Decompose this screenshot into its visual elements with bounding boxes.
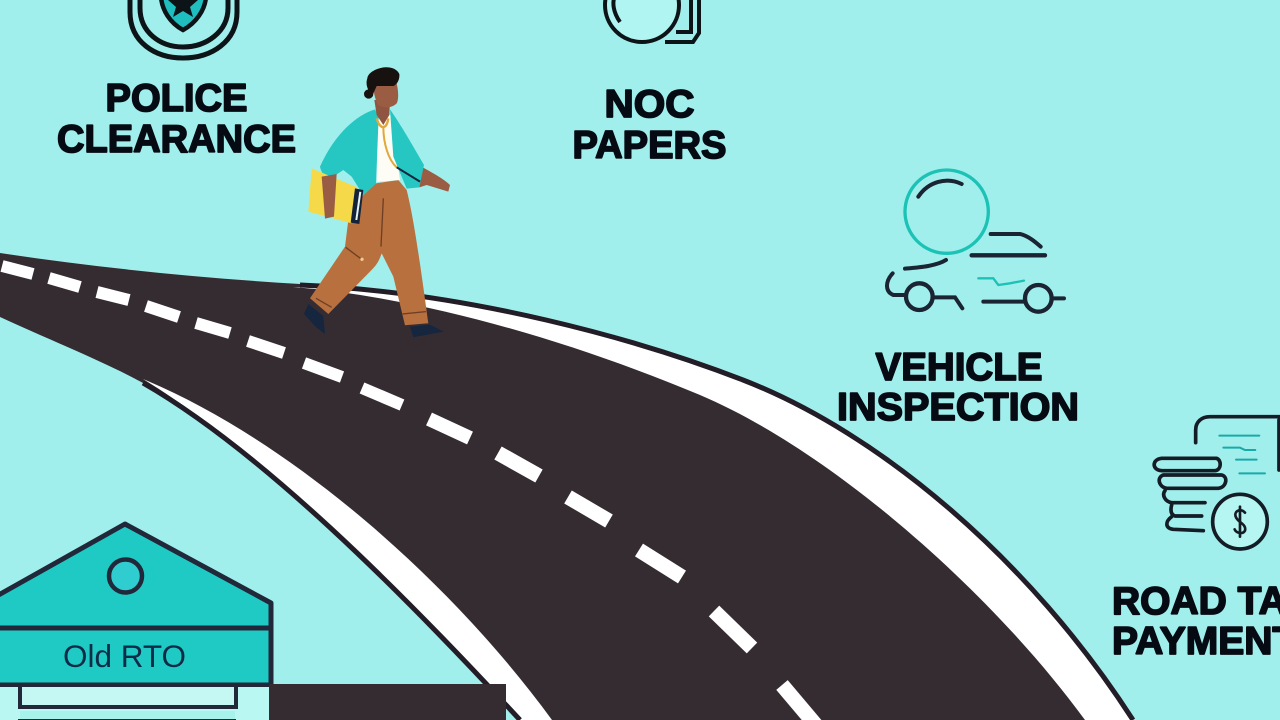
coin <box>1213 494 1267 549</box>
trousers <box>310 180 428 325</box>
icon: road tax payment <box>1154 417 1280 549</box>
icon: NOC papers <box>605 0 699 42</box>
heading: vehicle inspection: INSPECTION <box>837 386 1079 429</box>
heading: police clearance: CLEARANCE <box>57 118 296 161</box>
hair <box>364 67 399 99</box>
folder book spine <box>351 188 363 224</box>
road edge: upper white band <box>293 287 1133 720</box>
left forearm <box>419 167 450 192</box>
lanyard and strap <box>383 127 397 167</box>
building label: Old RTO <box>63 638 186 674</box>
heading: police clearance <box>57 77 296 161</box>
magnifier ring <box>905 170 988 253</box>
heading: NOC papers: PAPERS <box>572 124 726 167</box>
road centre dashes <box>2 266 820 720</box>
road edge: upper outline <box>300 285 1133 720</box>
necklace <box>377 118 388 127</box>
heading: road tax payment <box>1112 580 1280 663</box>
icon: police shield <box>130 0 237 58</box>
building emblem circle <box>109 560 142 592</box>
heading: police clearance: POLICE <box>106 77 248 120</box>
face <box>373 83 398 107</box>
neck <box>374 100 390 125</box>
building columns <box>0 687 269 720</box>
heading: NOC papers <box>572 83 726 167</box>
road <box>0 253 1133 720</box>
right arm holding folder <box>322 174 337 219</box>
heading: vehicle inspection <box>837 346 1079 429</box>
person walking <box>304 67 450 337</box>
icon: vehicle inspection <box>887 170 1064 312</box>
knee dot <box>360 258 364 261</box>
shirt <box>377 115 400 182</box>
road edge: lower white band <box>143 379 552 720</box>
heading: vehicle inspection: VEHICLE <box>876 346 1042 389</box>
building base block <box>269 684 506 720</box>
road edge: lower outline <box>143 383 520 720</box>
yellow folder <box>308 168 357 223</box>
dollar sign <box>1235 507 1245 537</box>
trouser crease <box>316 198 426 314</box>
right shoe <box>410 325 444 337</box>
heading: NOC papers: NOC <box>604 83 694 126</box>
building: Old RTO <box>0 524 506 720</box>
left shoe <box>304 304 325 334</box>
jacket <box>320 109 424 195</box>
